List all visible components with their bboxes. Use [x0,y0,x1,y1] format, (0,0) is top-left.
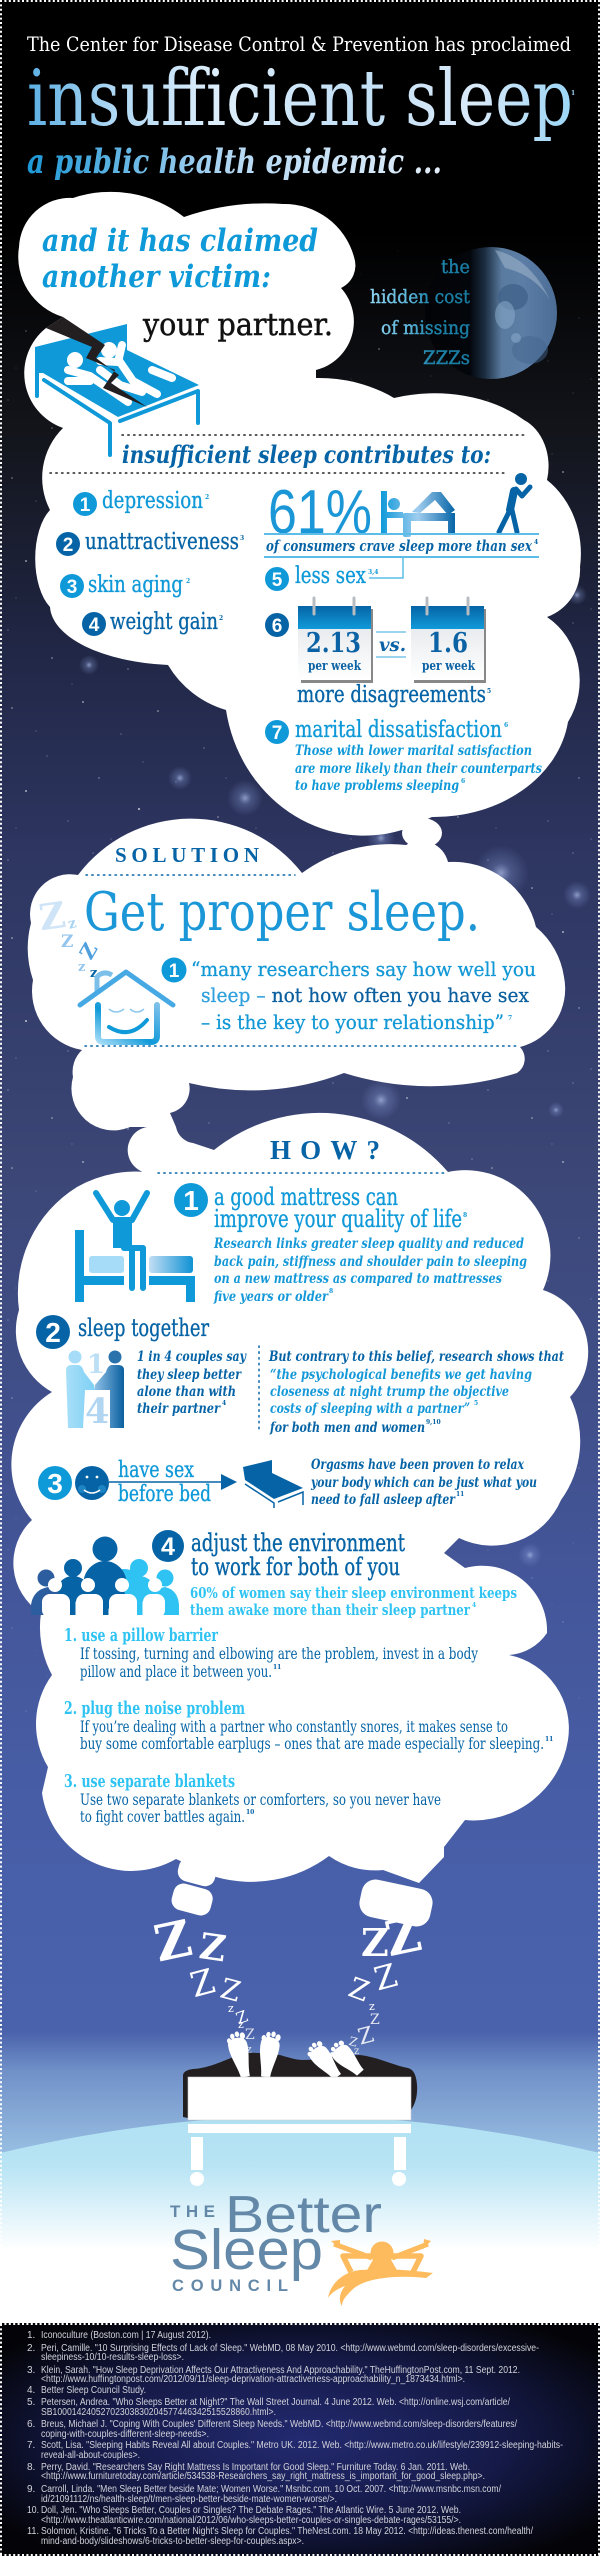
icon: smiley [75,1466,109,1500]
how 2: sleep together: 2 [45,1317,61,1348]
stat: 61% of consumers crave sleep more than sex: of consumers crave sleep more than sex [266,538,532,555]
how 1: a good mattress: on a new mattress as compared to mattresses [214,1271,502,1287]
how 2: sleep together: sleep together [78,1314,209,1342]
floating Zs: z [78,960,85,975]
effect 5: less sex: less sex [295,563,366,589]
reference list: sleepiness-10/10-results-sleep-loss>. [41,2352,184,2363]
moon caption: the hidden cost of missing ZZZs [370,256,470,369]
background: horizon ground [0,2116,600,2330]
arrow [109,1474,237,1490]
reference list: 8. [27,2462,35,2473]
quote about sleep and relationships: sleep – not how often you have sex [201,983,530,1007]
tip 1: use a pillow barrier: pillow and place it between you. [80,1662,272,1681]
quote about sleep and relationships: “many researchers say how well you [191,957,536,981]
tip 3: use separate blankets [64,1771,441,1826]
effect 7: marital dissatisfaction: 6 [504,722,508,729]
snoring Zs: left sleeper: Z [149,1908,197,1973]
effect 7: marital dissatisfaction: marital dissatisfaction [295,717,502,743]
tip 3: use separate blankets: Use two separate blankets or comforters, so you never have [80,1790,441,1809]
effect 2: unattractiveness: unattractiveness [85,529,239,555]
how 3: have sex before bed: need to fall asleep after [311,1492,456,1508]
snoring Zs: right sleeper: Z [370,1956,401,1998]
how 4: adjust the environment: them awake more than their sleep partner [190,1601,471,1619]
snoring Zs: right sleeper [344,1906,426,2057]
reference list: 11. [27,2526,39,2537]
floating Zs: z [90,966,97,981]
reference list: Better Sleep Council Study. [41,2385,146,2396]
reference list: Klein, Sarah. "How Sleep Deprivation Affects Our Attractiveness And Approachability." TheHuffingtonPost.com, 11 Sept. 2012. [41,2365,520,2376]
how 3: have sex before bed: before bed [118,1482,211,1507]
logo: The Better Sleep Council: Better [225,2186,382,2244]
snoring Zs: right sleeper: z [354,2046,359,2057]
reference list: mind-and-body/slideshows/6-tricks-to-better-sleep-for-couples.aspx>. [41,2536,304,2547]
calendar: 2.13 per week: 2.13 [306,628,361,659]
snoring Zs: left sleeper: Z [217,1972,244,2009]
how 1: a good mattress: five years or older [213,1289,329,1305]
snoring Zs: right sleeper: Z [361,1920,389,1965]
heading: solution: SOLUTION [115,843,259,867]
moon caption: the hidden cost of missing ZZZs: of missing [381,317,470,339]
how 1: a good mattress: improve your quality of life [214,1205,462,1233]
reference list: <http://www.huffingtonpost.com/2012/09/11/sleep-deprivation-attractiveness-approachability_n_1873434.html>. [41,2374,465,2385]
snoring Zs: right sleeper: Z [344,1971,374,2008]
cloud text: your partner: your partner. [142,307,333,343]
connector line [369,557,403,578]
effect 3: skin aging [60,572,190,598]
floating Zs: z [66,915,78,933]
cloud text: and it has claimed another victim [42,223,318,295]
logo: The Better Sleep Council [170,2186,433,2306]
how 1: a good mattress: a good mattress can [214,1183,398,1211]
floating Zs: Z [74,939,103,963]
reference list: Breus, Michael J. "Coping With Couples' Different Sleep Needs." WebMD. <http://www.webmd.com/sleep-disorders/features/ [41,2419,517,2430]
effect 5: less sex: 5 [272,570,283,591]
tip 3: use separate blankets: 3. use separate blankets [64,1771,235,1792]
reference list: 7. [27,2440,35,2451]
effect 2: unattractiveness [56,529,244,556]
how 2: sleep together: for both men and women [269,1420,425,1436]
reference list: 2. [27,2343,35,2354]
effect 7: marital dissatisfaction: Those with lower marital satisfaction [295,743,532,759]
how 3: have sex before bed: 3 [47,1468,63,1499]
effect 3: skin aging: 3 [67,577,77,598]
tip 2: plug the noise problem [64,1698,553,1753]
reference list: 6. [27,2419,35,2430]
icon: person beside bed with house roof [381,491,455,537]
tip 1: use a pillow barrier: 11 [273,1664,281,1671]
reference list: 3. [27,2365,35,2376]
effect 2: unattractiveness: 2 [63,535,73,556]
icon: row of five people [31,1536,179,1618]
how 3: have sex before bed: have sex [118,1458,194,1483]
icon: couple in a bed split by a crack [35,317,199,455]
snoring Zs: left sleeper: z [228,2002,234,2015]
cloud panel: solution and how [11,819,588,1883]
stat: 61% of consumers crave sleep more than sex [264,473,539,557]
icon: sleeping house with floating Zs [36,894,173,1042]
floating Zs [36,894,103,981]
snoring Zs: left sleeper: Z [197,1925,229,1970]
snoring Zs: right sleeper: Z [355,2022,377,2051]
cloud panel: the problem [18,192,581,848]
effect 6: more disagreements: 6 [272,616,282,637]
effect 1: depression: depression [102,488,203,514]
thought bubble stalks [169,1855,435,1929]
floating Zs: Z [36,894,68,939]
reference list: 10. [27,2505,39,2516]
how 2: sleep together: their partner [137,1401,221,1417]
effect 3: skin aging: skin aging [88,572,183,598]
effect 1: depression: 1 [80,495,91,516]
title footnote: 1 [571,90,575,97]
reference list: Perry, David. "Researchers Say Right Mattress Is Important for Good Sleep." Furniture Today. 6 Jan. 2011. Web. [41,2462,470,2473]
tip 1: use a pillow barrier: 1. use a pillow barrier [64,1625,218,1646]
reference list: Iconoculture (Boston.com | 17 August 2012). [41,2330,211,2341]
logo: The Better Sleep Council: COUNCIL [172,2277,288,2295]
reference list: coping-with-couples-different-sleep-needs>. [41,2429,209,2440]
how 4: adjust the environment [152,1529,517,1619]
tip 2: plug the noise problem: 11 [545,1736,553,1743]
cloud text: and it has claimed another victim: and it has claimed [42,223,318,259]
effect 3: skin aging: 2 [186,578,190,585]
effect 1: depression [73,488,209,516]
reference list: <http://www.theatlanticwire.com/national/2012/06/who-sleeps-better-couples-or-singles-debate-rages/53155/>. [41,2515,461,2526]
how 2: sleep together: 4 [222,1400,226,1407]
how 2: sleep together: “the psychological benefits we get having [270,1367,532,1383]
icon: person stretching on a bed [75,1193,195,1302]
icon: couple holding hands, 1 in 4 [66,1350,124,1432]
effect 4: weight gain: 2 [219,615,223,622]
how 4: adjust the environment: 60% of women say their sleep environment keeps [190,1584,517,1602]
how 3: have sex before bed: your body which can be just what you [310,1475,537,1491]
reference list: Carroll, Linda. "Men Sleep Better beside Mate; Women Worse." Msnbc.com. 10 Oct. 2007. <http://www.msnbc.msn.com/ [41,2484,501,2495]
calendar: 2.13 per week [298,598,373,683]
effect 1: depression: 2 [205,494,209,501]
how 4: adjust the environment: to work for both of you [191,1553,400,1581]
heading: how: HOW? [270,1135,380,1165]
stat: 61% of consumers crave sleep more than sex: 61% [268,478,372,547]
reference list: Peri, Camille. "10 Surprising Effects of Lack of Sleep." WebMD, 08 May 2010. <http://www.webmd.com/sleep-disorders/excessive- [41,2343,539,2354]
calendar: 1.6 per week: per week [422,659,476,674]
quote about sleep and relationships: – is the key to your relationship” [201,1010,504,1034]
background: star field [8,248,592,1712]
logo: The Better Sleep Council: THE [170,2202,215,2221]
background: glowing stars [79,585,591,1567]
effect 6: more disagreements: 5 [487,688,491,695]
how 1: a good mattress: 8 [329,1288,333,1295]
how 2: sleep together: 1 in 4 couples say [137,1349,247,1365]
reference list: Doll, Jen. "Who Sleeps Better, Couples or Singles? The Debate Rages." The Atlantic Wire. 5 June 2012. Web. [41,2505,461,2516]
tip 3: use separate blankets: to fight cover battles again. [80,1807,245,1826]
how 2: sleep together: alone than with [137,1384,236,1400]
reference list [27,2330,563,2547]
moon caption: the hidden cost of missing ZZZs: the [441,256,470,278]
effect 2: unattractiveness: 3 [240,535,244,542]
reference list: SB10001424052702303830204577446342515528860.html>. [41,2407,276,2418]
heading: insufficient sleep contributes to: insufficient sleep contributes to: [122,440,491,469]
effect 7: marital dissatisfaction: to have problems sleeping [295,778,459,794]
how 4: adjust the environment: adjust the environment [191,1529,405,1557]
icon: couple holding hands, 1 in 4: 4 [85,1391,109,1432]
how 4: adjust the environment: 4 [161,1533,175,1561]
how 1: a good mattress: 1 [183,1185,199,1216]
how 2: sleep together: they sleep better [137,1367,242,1383]
how 1: a good mattress [174,1183,527,1305]
how 1: a good mattress: Research links greater sleep quality and reduced [213,1236,524,1252]
moon [425,247,557,379]
effect 4: weight gain: weight gain [110,609,218,635]
how 4: adjust the environment: 4 [472,1602,476,1609]
calendar: 2.13 per week: per week [308,659,362,674]
versus label: vs. [379,634,406,656]
snoring Zs: left sleeper: Z [233,2006,250,2028]
tip 1: use a pillow barrier: If tossing, turning and elbowing are the problem, invest in a body [80,1644,478,1663]
moon caption: the hidden cost of missing ZZZs: ZZZs [423,347,470,369]
snoring Zs: right sleeper: z [369,2000,375,2013]
cloud text: and it has claimed another victim: another victim: [42,259,271,295]
effect 7: marital dissatisfaction: 7 [272,723,282,744]
stat: 61% of consumers crave sleep more than sex: 4 [534,539,538,546]
illustration: bed with blanket and four feet [183,2030,417,2186]
how 2: sleep together: costs of sleeping with a partner” [270,1401,470,1417]
headline: get proper sleep: Get proper sleep. [84,882,480,943]
effect 6: more disagreements [265,598,491,708]
snoring Zs: left sleeper: Z [186,1961,219,2006]
snoring Zs: left sleeper: Z [245,2027,255,2043]
subtitle: a public health epidemic: a public health epidemic ... [27,142,442,182]
effect 6: more disagreements: more disagreements [297,682,486,708]
how 2: sleep together [36,1314,564,1436]
tip 3: use separate blankets: 10 [246,1809,254,1816]
reference list: 4. [27,2385,35,2396]
reference list: Solomon, Kristine. "6 Tricks To a Better Night's Sleep for Couples." TheNest.com. 18 May 2012. <http://ideas.thenest.com/health/ [41,2526,533,2537]
reference list: Petersen, Andrea. "Who Sleeps Better at Night?" The Wall Street Journal. 4 June 2012. Web. <http://online.wsj.com/article/ [41,2397,510,2408]
how 2: sleep together: closeness at night trump the objective [270,1384,509,1400]
how 1: a good mattress: 8 [463,1212,467,1219]
effect 4: weight gain [82,609,223,636]
quote about sleep and relationships: 1 [169,961,180,982]
effect 7: marital dissatisfaction: 6 [461,778,465,785]
quote about sleep and relationships: 7 [508,1015,512,1022]
reference list: 9. [27,2484,35,2495]
calendar: 1.6 per week: 1.6 [428,628,468,659]
effect 7: marital dissatisfaction: are more likely than their counterparts [295,761,542,777]
snoring Zs: left sleeper: z [246,2043,252,2056]
effect 5: less sex [265,563,378,591]
effect 7: marital dissatisfaction [265,717,542,794]
floating Zs: Z [61,932,73,952]
effect 5: less sex: 3,4 [368,569,378,576]
reference list: 5. [27,2397,35,2408]
tip 1: use a pillow barrier [64,1625,478,1681]
reference list: <http://www.furnituretoday.com/article/534538-Researchers_say_right_mattress_is_important_for_good_sleep.php>. [41,2471,485,2482]
snoring Zs: right sleeper: Z [370,2012,380,2028]
icon: bed [243,1460,303,1508]
tip 2: plug the noise problem: 2. plug the noise problem [64,1698,245,1719]
quote about sleep and relationships [85,957,536,1046]
reference list: 1. [27,2330,35,2341]
how 1: a good mattress: back pain, stiffness and shoulder pain to sleeping [214,1254,527,1270]
how 3: have sex before bed: Orgasms have been proven to relax [311,1457,524,1473]
reference list: reveal-all-about-couples>. [41,2450,140,2461]
logo mark: stretching figure [328,2239,433,2306]
snoring Zs: right sleeper: Z [380,1906,426,1968]
how 2: sleep together: 5 [474,1400,478,1407]
how 3: have sex before bed: 11 [456,1491,464,1498]
how 2: sleep together: 9,10 [426,1419,441,1426]
calendar: 1.6 per week [411,598,486,683]
how 3: have sex before bed [38,1457,537,1508]
snoring Zs: right sleeper: Z [347,2034,359,2050]
snoring Zs: left sleeper [149,1908,255,2056]
effect 4: weight gain: 4 [89,615,100,636]
icon: standing figure [499,473,530,532]
icon: couple holding hands, 1 in 4: 1 [87,1350,105,1380]
references panel [0,2323,600,2556]
snoring Zs: left sleeper: z [238,2018,244,2031]
moon caption: the hidden cost of missing ZZZs: hidden cost [370,286,470,308]
logo: The Better Sleep Council: Sleep [170,2218,323,2282]
reference list: id/21091112/ns/health-sleep/t/men-sleep-better-beside-mate-women-worse/>. [41,2494,337,2505]
